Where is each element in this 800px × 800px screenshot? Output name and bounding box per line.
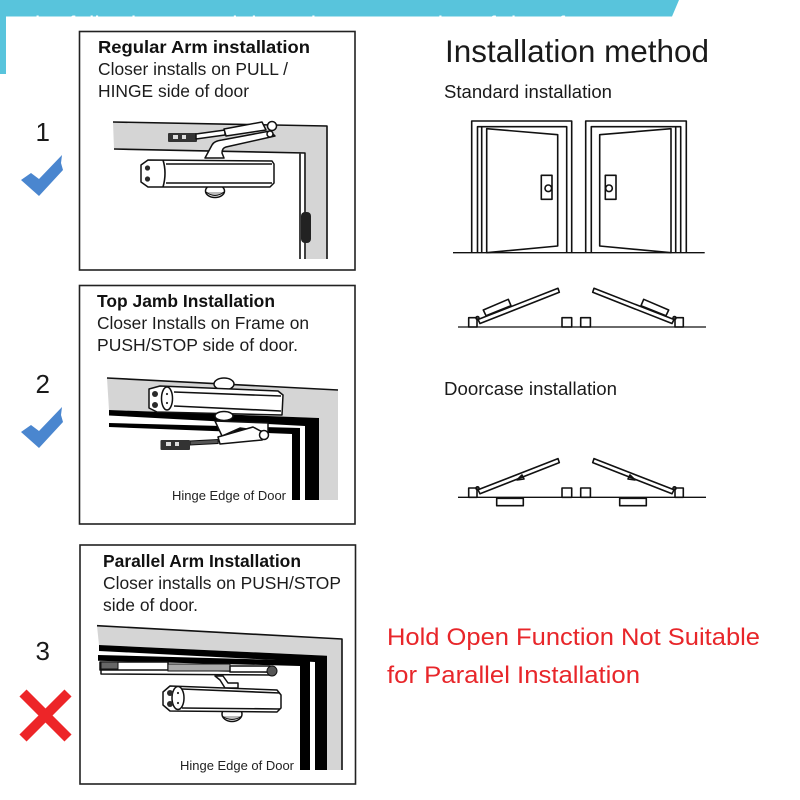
panel: top jamb installation: PUSH/STOP side of door. <box>97 335 298 355</box>
icon: right door <box>586 121 686 253</box>
illustration: parallel arm door closer: Hinge Edge of Door <box>180 758 295 773</box>
step 2 marker: 2 <box>36 369 50 399</box>
top banner <box>0 0 679 74</box>
panel: parallel arm installation: Parallel Arm Installation <box>103 551 301 571</box>
top banner: The following materials and system styles of door f <box>20 12 565 39</box>
panel: parallel arm installation: Closer installs on PUSH/STOP <box>103 573 341 593</box>
panel: regular arm installation <box>80 32 355 270</box>
panel: parallel arm installation <box>80 545 356 784</box>
panel: regular arm installation: Closer installs on PULL / <box>98 59 288 79</box>
heading: doorcase installation: Doorcase installation <box>444 379 617 399</box>
step 1 marker <box>21 117 63 196</box>
illustration: parallel arm door closer <box>97 626 342 773</box>
panel: regular arm installation: Regular Arm installation <box>98 37 310 57</box>
step 3 marker <box>23 636 68 738</box>
icon: left door <box>472 121 572 253</box>
panel: parallel arm installation: side of door. <box>103 595 198 615</box>
icon: blue check mark <box>21 407 63 448</box>
panel: regular arm installation: HINGE side of door <box>98 81 249 101</box>
icon: red cross <box>23 693 68 738</box>
diagram: standard installation plan view <box>458 288 706 327</box>
callout: hold open warning: Hold Open Function Not Suitable <box>387 624 760 651</box>
diagram: doorcase installation plan view <box>458 459 706 506</box>
step 3 marker: 3 <box>36 636 50 666</box>
title: installation method: Installation method <box>445 33 709 69</box>
panel: top jamb installation <box>80 286 355 524</box>
illustration: regular arm door closer <box>113 122 327 259</box>
illustration: top jamb door closer <box>107 378 338 503</box>
callout: hold open warning: for Parallel Installation <box>387 662 640 689</box>
callout: hold open warning <box>387 624 760 689</box>
diagram: standard installation doors <box>453 121 705 253</box>
panel: top jamb installation: Closer Installs on Frame on <box>97 313 309 333</box>
panel: top jamb installation: Top Jamb Installation <box>97 291 275 311</box>
heading: standard installation: Standard installation <box>444 82 612 102</box>
icon: blue check mark <box>21 155 63 196</box>
illustration: top jamb door closer: Hinge Edge of Door <box>172 488 287 503</box>
step 1 marker: 1 <box>36 117 50 147</box>
step 2 marker <box>21 369 63 448</box>
